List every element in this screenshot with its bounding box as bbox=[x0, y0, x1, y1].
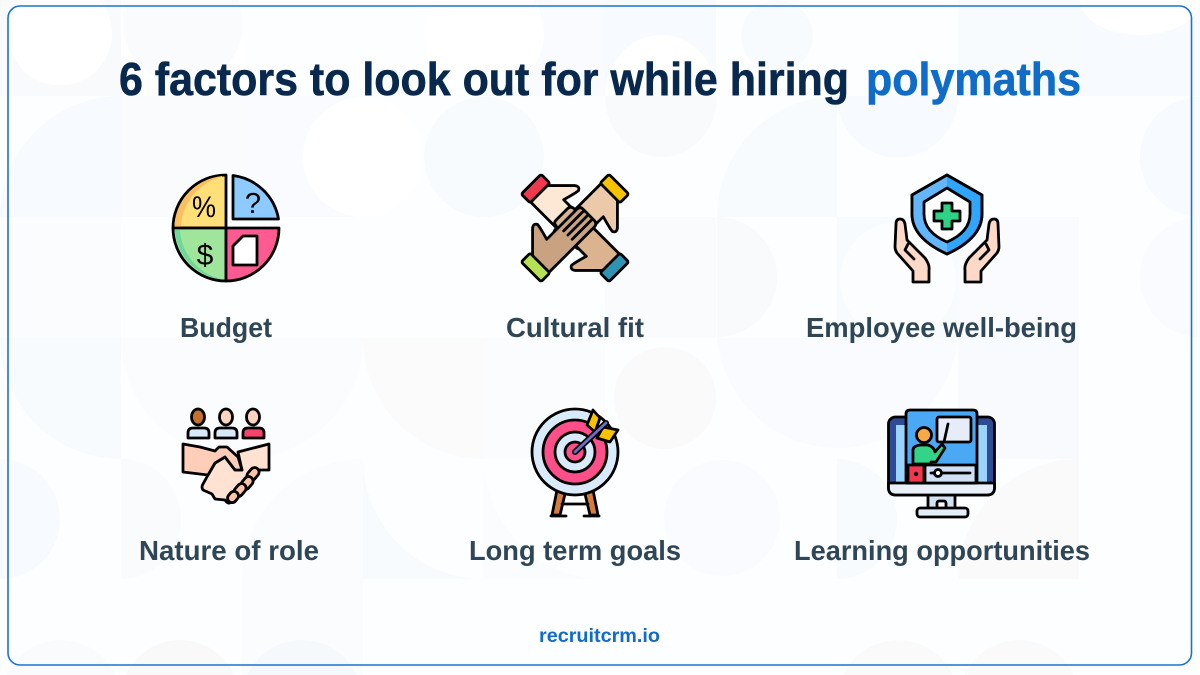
label: Nature of role: Nature of role bbox=[139, 535, 319, 566]
item: Long term goals bbox=[469, 409, 681, 566]
title: polymaths bbox=[866, 53, 1081, 105]
label: Long term goals: Long term goals bbox=[469, 535, 681, 566]
icon: budget pie chart: % bbox=[192, 191, 216, 224]
icon: budget pie chart bbox=[173, 175, 279, 281]
icon: budget pie chart: ? bbox=[245, 188, 261, 220]
label: Employee well-being: Employee well-being bbox=[806, 312, 1077, 343]
title: 6 factors to look out for while hiring bbox=[119, 53, 849, 105]
item: Budget bbox=[173, 175, 279, 343]
website footer: recruitcrm.io bbox=[539, 626, 660, 647]
icon: archery target with arrow bbox=[532, 409, 618, 516]
icon: stacked hands bbox=[509, 162, 641, 294]
label: Learning opportunities: Learning opportunities bbox=[794, 535, 1090, 566]
icon: shield held by hands bbox=[895, 175, 999, 282]
item: Nature of role bbox=[139, 409, 319, 566]
item: Employee well-being bbox=[806, 175, 1077, 343]
item: Cultural fit bbox=[506, 162, 644, 343]
label: Cultural fit: Cultural fit bbox=[506, 312, 644, 343]
icon: handshake with three people bbox=[183, 409, 269, 504]
icon: online class on monitor bbox=[888, 410, 994, 517]
item: Learning opportunities bbox=[794, 410, 1090, 566]
label: Budget: Budget bbox=[180, 312, 272, 343]
icon: budget pie chart: $ bbox=[197, 239, 214, 272]
